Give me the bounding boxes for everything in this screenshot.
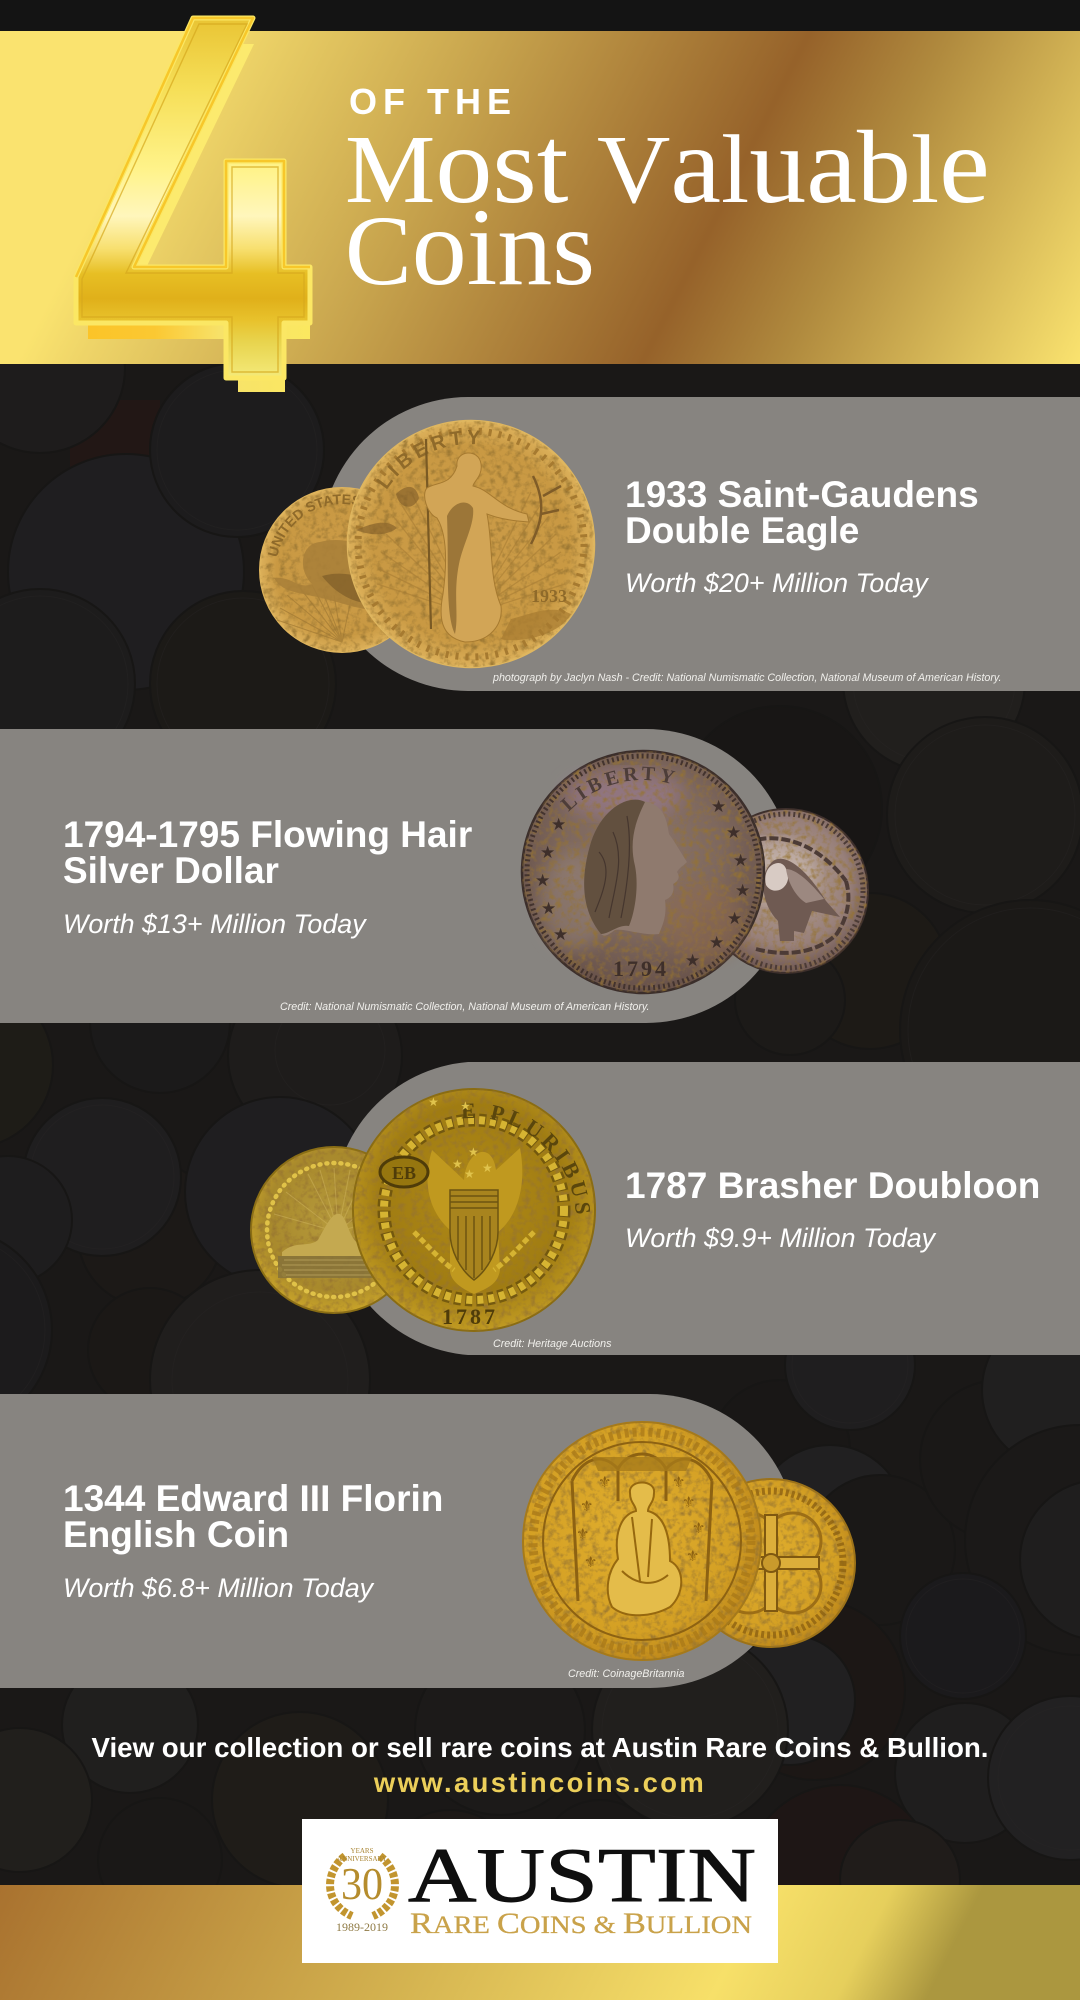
logo wreath (330, 1847, 395, 1934)
logo wreath: 30 (341, 1858, 383, 1909)
logo wreath: ANNIVERSARY (337, 1855, 387, 1863)
coin: florin obverse: ⚜ (682, 1494, 695, 1511)
coin: florin reverse (687, 1479, 855, 1647)
panel 1 heading: Double Eagle (625, 510, 859, 551)
coin: flowing hair obverse: ★ (535, 871, 550, 890)
coin: flowing hair obverse: LIBERTY (560, 766, 676, 812)
call to action: View our collection or sell rare coins at Austin Rare Coins & Bullion. (92, 1732, 988, 1763)
panel 1: saint-gaudens (259, 397, 1080, 691)
coin: brasher obverse (352, 1088, 596, 1332)
panel 2 value: Worth $13+ Million Today (63, 909, 367, 939)
coin: florin obverse: ⚜ (584, 1554, 597, 1571)
logo wreath: 1989-2019 (336, 1920, 388, 1934)
coin: double eagle reverse: UNITED STATES (268, 494, 356, 556)
coin: flowing hair obverse: ★ (726, 823, 741, 842)
panel 2 background (0, 729, 793, 1023)
title: most valuable coins: Most Valuable (345, 105, 990, 227)
panel 4 credit: Credit: CoinageBritannia (568, 1668, 684, 1680)
panel 1 background (321, 397, 1080, 691)
bottom gold band (0, 1885, 1080, 2000)
coin: double eagle reverse (259, 487, 390, 653)
coin: florin obverse: ⚜ (672, 1474, 685, 1491)
panel 3 value: Worth $9.9+ Million Today (625, 1223, 937, 1253)
coin: flowing hair obverse: ★ (735, 881, 750, 900)
logo background (302, 1819, 778, 1963)
coin: florin obverse (523, 1422, 761, 1660)
coin: flowing hair reverse (704, 809, 868, 973)
coin: brasher obverse: E PLURIBUS (461, 1104, 590, 1214)
coin: brasher obverse: ★ (482, 1161, 493, 1175)
panel 4 heading: English Coin (63, 1514, 289, 1555)
coin: florin obverse: ⚜ (580, 1498, 593, 1515)
panel 1 credit: photograph by Jaclyn Nash - Credit: National Numismatic Collection, National Museum of American History. (492, 672, 1001, 684)
coin: flowing hair obverse: ★ (551, 815, 566, 834)
coin: florin obverse: ⚜ (692, 1520, 705, 1537)
panel 2 heading: 1794-1795 Flowing Hair (63, 814, 472, 855)
top gold banner (0, 31, 1080, 364)
coin: flowing hair obverse (520, 750, 766, 994)
panel 3 heading: 1787 Brasher Doubloon (625, 1165, 1040, 1206)
panel 3: brasher doubloon (250, 1062, 1080, 1355)
coin: brasher reverse (251, 1147, 417, 1313)
coin: flowing hair obverse: 1794 (613, 956, 669, 981)
coin: brasher obverse: ★ (428, 1095, 439, 1109)
website link: www.austincoins.com (373, 1767, 706, 1798)
title: most valuable coins (345, 105, 990, 308)
coin: flowing hair obverse: ★ (727, 909, 742, 928)
panel 2: flowing hair (0, 729, 869, 1023)
coin: flowing hair obverse: ★ (540, 843, 555, 862)
logo wordmark: AUSTIN (408, 1832, 756, 1918)
logo tagline: RARE COINS & BULLION (410, 1907, 752, 1940)
coin: brasher obverse: ★ (468, 1145, 479, 1159)
panel 4 value: Worth $6.8+ Million Today (63, 1573, 375, 1603)
title: of the: OF THE (349, 81, 517, 122)
coin: double eagle obverse (346, 420, 596, 668)
coin: flowing hair obverse: ★ (711, 797, 726, 816)
panel 4: edward florin (0, 1394, 855, 1688)
coin: florin obverse: ⚜ (686, 1548, 699, 1565)
coin: flowing hair obverse: ★ (733, 851, 748, 870)
coin: flowing hair obverse: ★ (685, 951, 700, 970)
coin: brasher obverse: ★ (452, 1157, 463, 1171)
big number 4 (76, 18, 310, 392)
coin: florin obverse: ⚜ (598, 1474, 611, 1491)
coin: flowing hair obverse: ★ (709, 933, 724, 952)
coin: flowing hair obverse: ★ (553, 925, 568, 944)
panel 4 heading: 1344 Edward III Florin (63, 1478, 443, 1519)
panel 2 heading: Silver Dollar (63, 850, 279, 891)
coin: brasher obverse: 1787 (442, 1304, 498, 1329)
panel 1 value: Worth $20+ Million Today (625, 568, 929, 598)
coin: florin obverse: ⚜ (576, 1526, 589, 1543)
coin: brasher obverse: ★ (460, 1099, 471, 1113)
coin: flowing hair obverse: ★ (541, 899, 556, 918)
panel 1 heading: 1933 Saint-Gaudens (625, 474, 979, 515)
panel 2 credit: Credit: National Numismatic Collection, National Museum of American History. (280, 1001, 649, 1013)
panel 3 credit: Credit: Heritage Auctions (493, 1338, 612, 1350)
title: most valuable coins: Coins (345, 186, 595, 308)
logo wreath: YEARS (351, 1847, 374, 1855)
panel 3 background (333, 1062, 1080, 1355)
top dark band (0, 0, 1080, 32)
coin: brasher obverse: ★ (464, 1167, 475, 1181)
logo (302, 1819, 778, 1963)
coin: double eagle obverse: LIBERTY (376, 430, 480, 489)
panel 4 background (0, 1394, 797, 1688)
coin: double eagle obverse: 1933 (531, 586, 567, 606)
coin: brasher obverse: EB (392, 1163, 416, 1183)
